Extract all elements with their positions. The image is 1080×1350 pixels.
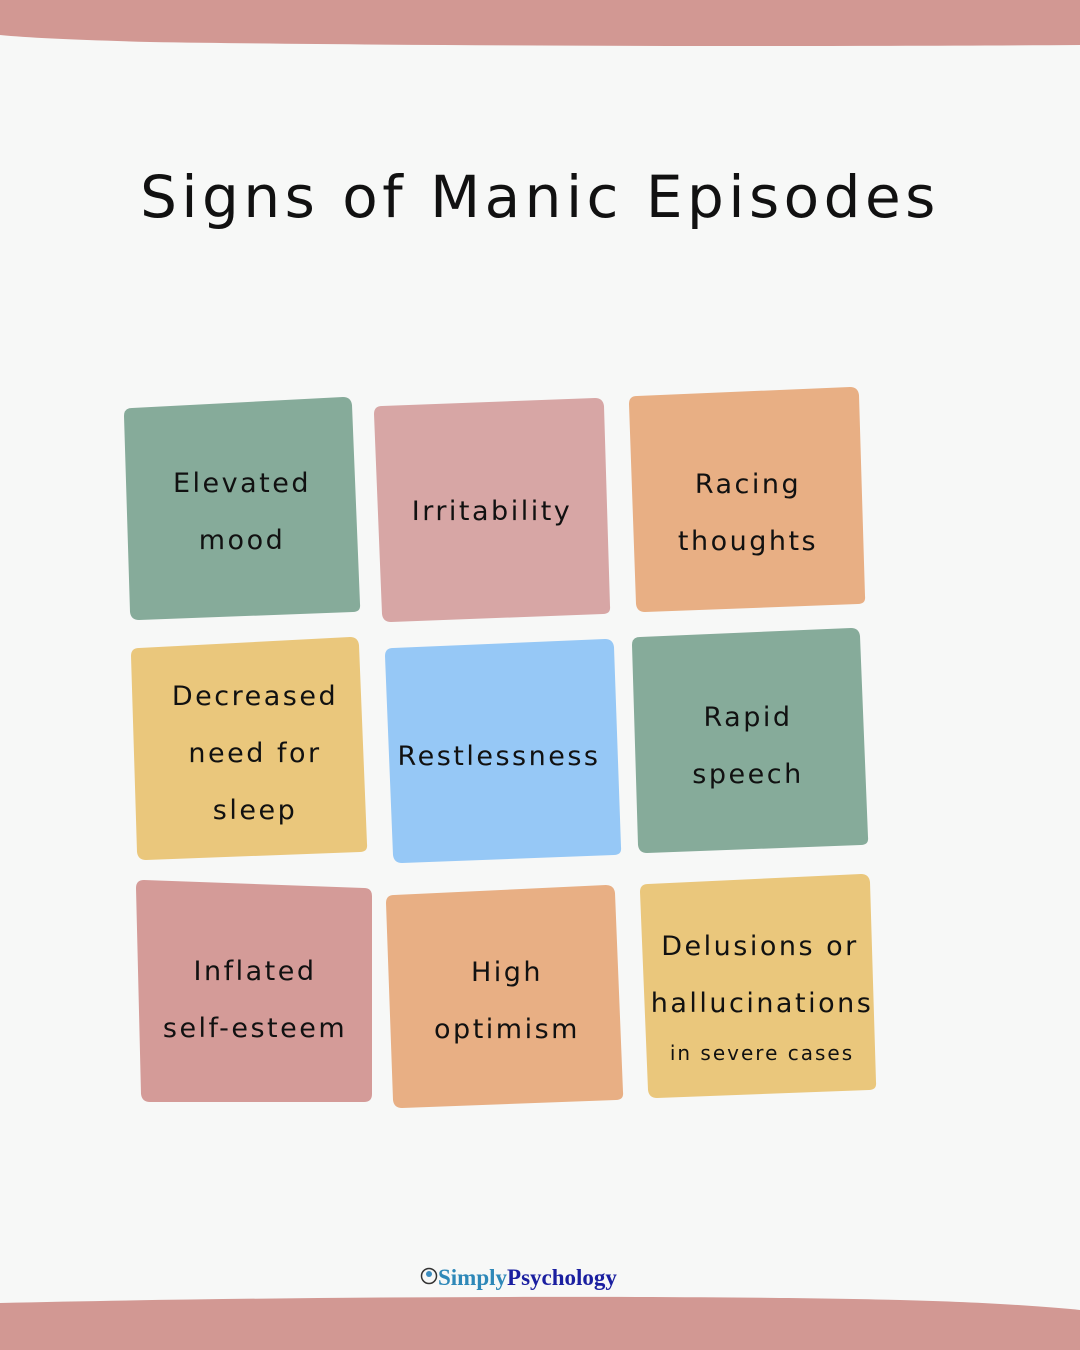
card: Irritability: Irritability [412, 496, 572, 527]
card: High optimism: optimism [434, 1014, 580, 1045]
card: Inflated self-esteem: self-esteem [163, 1013, 347, 1044]
card: Elevated mood [124, 397, 360, 620]
card: Inflated self-esteem: Inflated [194, 956, 316, 987]
title: Signs of Manic Episodes [140, 163, 940, 231]
card: Restlessness: Restlessness [398, 741, 600, 772]
card: Decreased need for sleep: need for [188, 738, 322, 769]
card: Racing thoughts: thoughts [678, 526, 818, 557]
card: Racing thoughts: Racing [695, 469, 801, 500]
card: Decreased need for sleep [131, 637, 367, 860]
top band [0, 0, 1080, 46]
card: Irritability [374, 398, 610, 622]
card: High optimism: High [471, 957, 543, 988]
logo: SimplyPsychology [438, 1265, 617, 1290]
card: Restlessness [385, 639, 621, 863]
card: Delusions or hallucinations: in severe cases [670, 1041, 854, 1065]
card: Elevated mood: Elevated [173, 468, 311, 499]
card: Elevated mood: mood [199, 525, 285, 556]
bottom band [0, 1297, 1080, 1350]
card: Rapid speech: speech [692, 759, 804, 790]
card: Decreased need for sleep: sleep [213, 795, 297, 826]
card: Rapid speech: Rapid [704, 702, 792, 733]
card: Racing thoughts [629, 387, 865, 612]
card: Delusions or hallucinations: Delusions or [661, 931, 859, 962]
card: Decreased need for sleep: Decreased [172, 681, 338, 712]
card: Delusions or hallucinations: hallucinations [651, 988, 873, 1019]
card: High optimism [386, 885, 623, 1108]
card: Rapid speech [632, 628, 868, 853]
card: Delusions or hallucinations [640, 874, 876, 1098]
card: Inflated self-esteem [136, 880, 372, 1102]
